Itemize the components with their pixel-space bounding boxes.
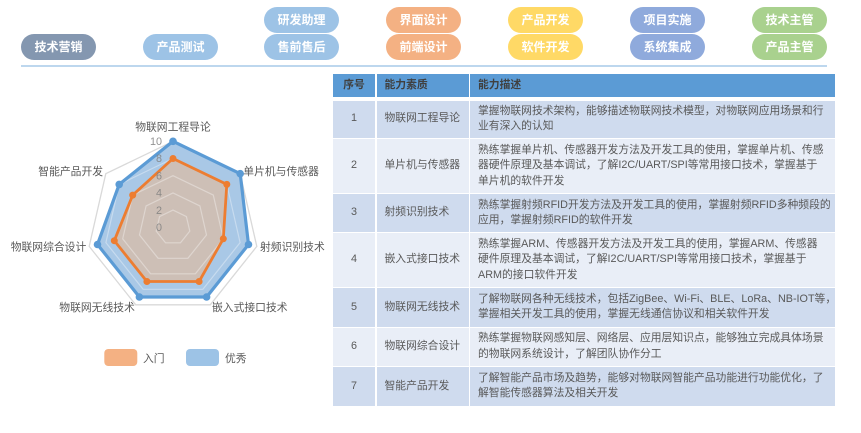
- row 2: 单片机与传感器: [384, 159, 460, 171]
- pill: 产品测试: 产品测试: [156, 38, 204, 55]
- pill: 售前售后: 售前售后: [277, 38, 326, 55]
- series fill: 优秀: [98, 141, 248, 297]
- table header: 序号: [343, 79, 365, 91]
- row 4: 硬件原理及基本调试，了解I2C/UART/SPI等常用接口技术，掌握基于: [478, 253, 807, 265]
- row 6: [333, 328, 835, 366]
- row 1: 1: [351, 112, 357, 124]
- row 7: 解智能传感器算法及相关开发: [478, 387, 618, 399]
- axis scale numbers: 0: [156, 222, 162, 234]
- series line: 入门: [111, 155, 230, 285]
- legend: 入门: [143, 351, 165, 365]
- row 4: [333, 233, 835, 287]
- row 1: 物联网工程导论: [384, 112, 460, 124]
- row 3: 熟练掌握射频RFID开发方法及开发工具的使用，掌握射频RFID多种频段的: [478, 198, 831, 210]
- row 1: [333, 101, 835, 138]
- table header: 能力描述: [478, 79, 521, 91]
- pill: 售前售后: [264, 34, 339, 60]
- pill: 产品测试: [143, 34, 218, 60]
- axis scale numbers: [150, 136, 162, 234]
- row 6: 物联网综合设计: [384, 340, 460, 352]
- axis labels: [11, 120, 325, 314]
- row 2: [333, 139, 835, 193]
- pill: 技术营销: 技术营销: [34, 38, 82, 55]
- axis scale numbers: 8: [156, 153, 162, 165]
- series fill: 入门: [114, 158, 227, 282]
- pill: 产品主管: [752, 34, 827, 60]
- legend: 优秀: [225, 352, 247, 365]
- pill: 界面设计: 界面设计: [399, 11, 448, 28]
- row 6: 的物联网系统设计，了解团队协作分工: [478, 348, 662, 360]
- axis scale numbers: 4: [156, 188, 162, 200]
- pill: 研发助理: 研发助理: [277, 11, 326, 28]
- pill: 前端设计: 前端设计: [399, 38, 448, 55]
- capability table: [333, 74, 836, 406]
- row 5: 掌握相关开发工具的使用，掌握无线通信协议和相关软件开发: [478, 308, 770, 320]
- row 3: [333, 194, 835, 232]
- pill: 技术主管: [752, 7, 827, 33]
- axis scale numbers: 10: [150, 136, 162, 148]
- pill: 产品开发: 产品开发: [521, 11, 570, 28]
- row 4: 4: [351, 253, 357, 265]
- axis scale numbers: 6: [156, 170, 162, 182]
- axis labels: 智能产品开发: [38, 164, 103, 178]
- row 1: 掌握物联网技术架构，能够描述物联网技术模型，对物联网应用场景和行: [478, 105, 824, 117]
- role pills: [21, 7, 827, 60]
- row 3: 应用，掌握射频RFID的软件开发: [478, 214, 633, 226]
- row 5: [333, 288, 836, 327]
- row 7: 了解智能产品市场及趋势，能够对物联网智能产品功能进行功能优化，了: [478, 372, 824, 384]
- row 7: [333, 367, 835, 406]
- row 2: 器硬件原理及基本调试，了解I2C/UART/SPI等常用接口技术，掌握基于: [478, 159, 817, 171]
- row 4: 熟练掌握ARM、传感器开发方法及开发工具的使用，掌握ARM、传感器: [478, 238, 818, 250]
- series line: 优秀: [94, 138, 252, 301]
- table header: 能力素质: [384, 79, 428, 91]
- table header: [333, 74, 835, 97]
- pill: 系统集成: 系统集成: [643, 38, 692, 55]
- row 3: 射频识别技术: [384, 206, 449, 218]
- row 4: ARM的接口软件开发: [478, 269, 578, 281]
- pill: 产品主管: 产品主管: [765, 38, 814, 55]
- row 2: 2: [351, 159, 357, 171]
- row 5: 物联网无线技术: [384, 301, 460, 313]
- axis labels: 单片机与传感器: [243, 164, 319, 178]
- axis labels: 射频识别技术: [260, 240, 325, 254]
- row 6: 6: [351, 340, 357, 352]
- row 2: 单片机的软件开发: [478, 174, 564, 186]
- row 7: 7: [351, 380, 357, 392]
- axis labels: 物联网工程导论: [135, 120, 211, 134]
- row 5: 了解物联网各种无线技术，包括ZigBee、Wi-Fi、BLE、LoRa、NB-IOT等，: [478, 293, 836, 305]
- row 5: 5: [351, 301, 357, 313]
- row 7: 智能产品开发: [384, 380, 449, 392]
- axis labels: 物联网综合设计: [11, 240, 86, 254]
- pill: 项目实施: 项目实施: [643, 11, 692, 28]
- row 6: 熟练掌握物联网感知层、网络层、应用层知识点，能够独立完成具体场景: [478, 332, 824, 344]
- radar chart: [11, 120, 325, 366]
- pill: 软件开发: [508, 34, 583, 60]
- pill: 技术主管: 技术主管: [765, 11, 814, 28]
- axis labels: 嵌入式接口技术: [212, 300, 288, 314]
- row 2: 熟练掌握单片机、传感器开发方法及开发工具的使用，掌握单片机、传感: [478, 144, 824, 156]
- pill: 系统集成: [630, 34, 705, 60]
- axis scale numbers: 2: [156, 205, 162, 217]
- axis labels: 物联网无线技术: [59, 300, 135, 314]
- pill: 研发助理: [264, 7, 339, 33]
- pill: 产品开发: [508, 7, 583, 33]
- pill: 项目实施: [630, 7, 705, 33]
- row 3: 3: [351, 206, 357, 218]
- pill: 软件开发: 软件开发: [521, 38, 570, 55]
- legend: [104, 349, 247, 366]
- pill: 前端设计: [386, 34, 461, 60]
- row 1: 业有深入的认知: [478, 120, 554, 132]
- pill: 技术营销: [21, 34, 96, 60]
- pill: 界面设计: [386, 7, 461, 33]
- row 4: 嵌入式接口技术: [384, 253, 460, 265]
